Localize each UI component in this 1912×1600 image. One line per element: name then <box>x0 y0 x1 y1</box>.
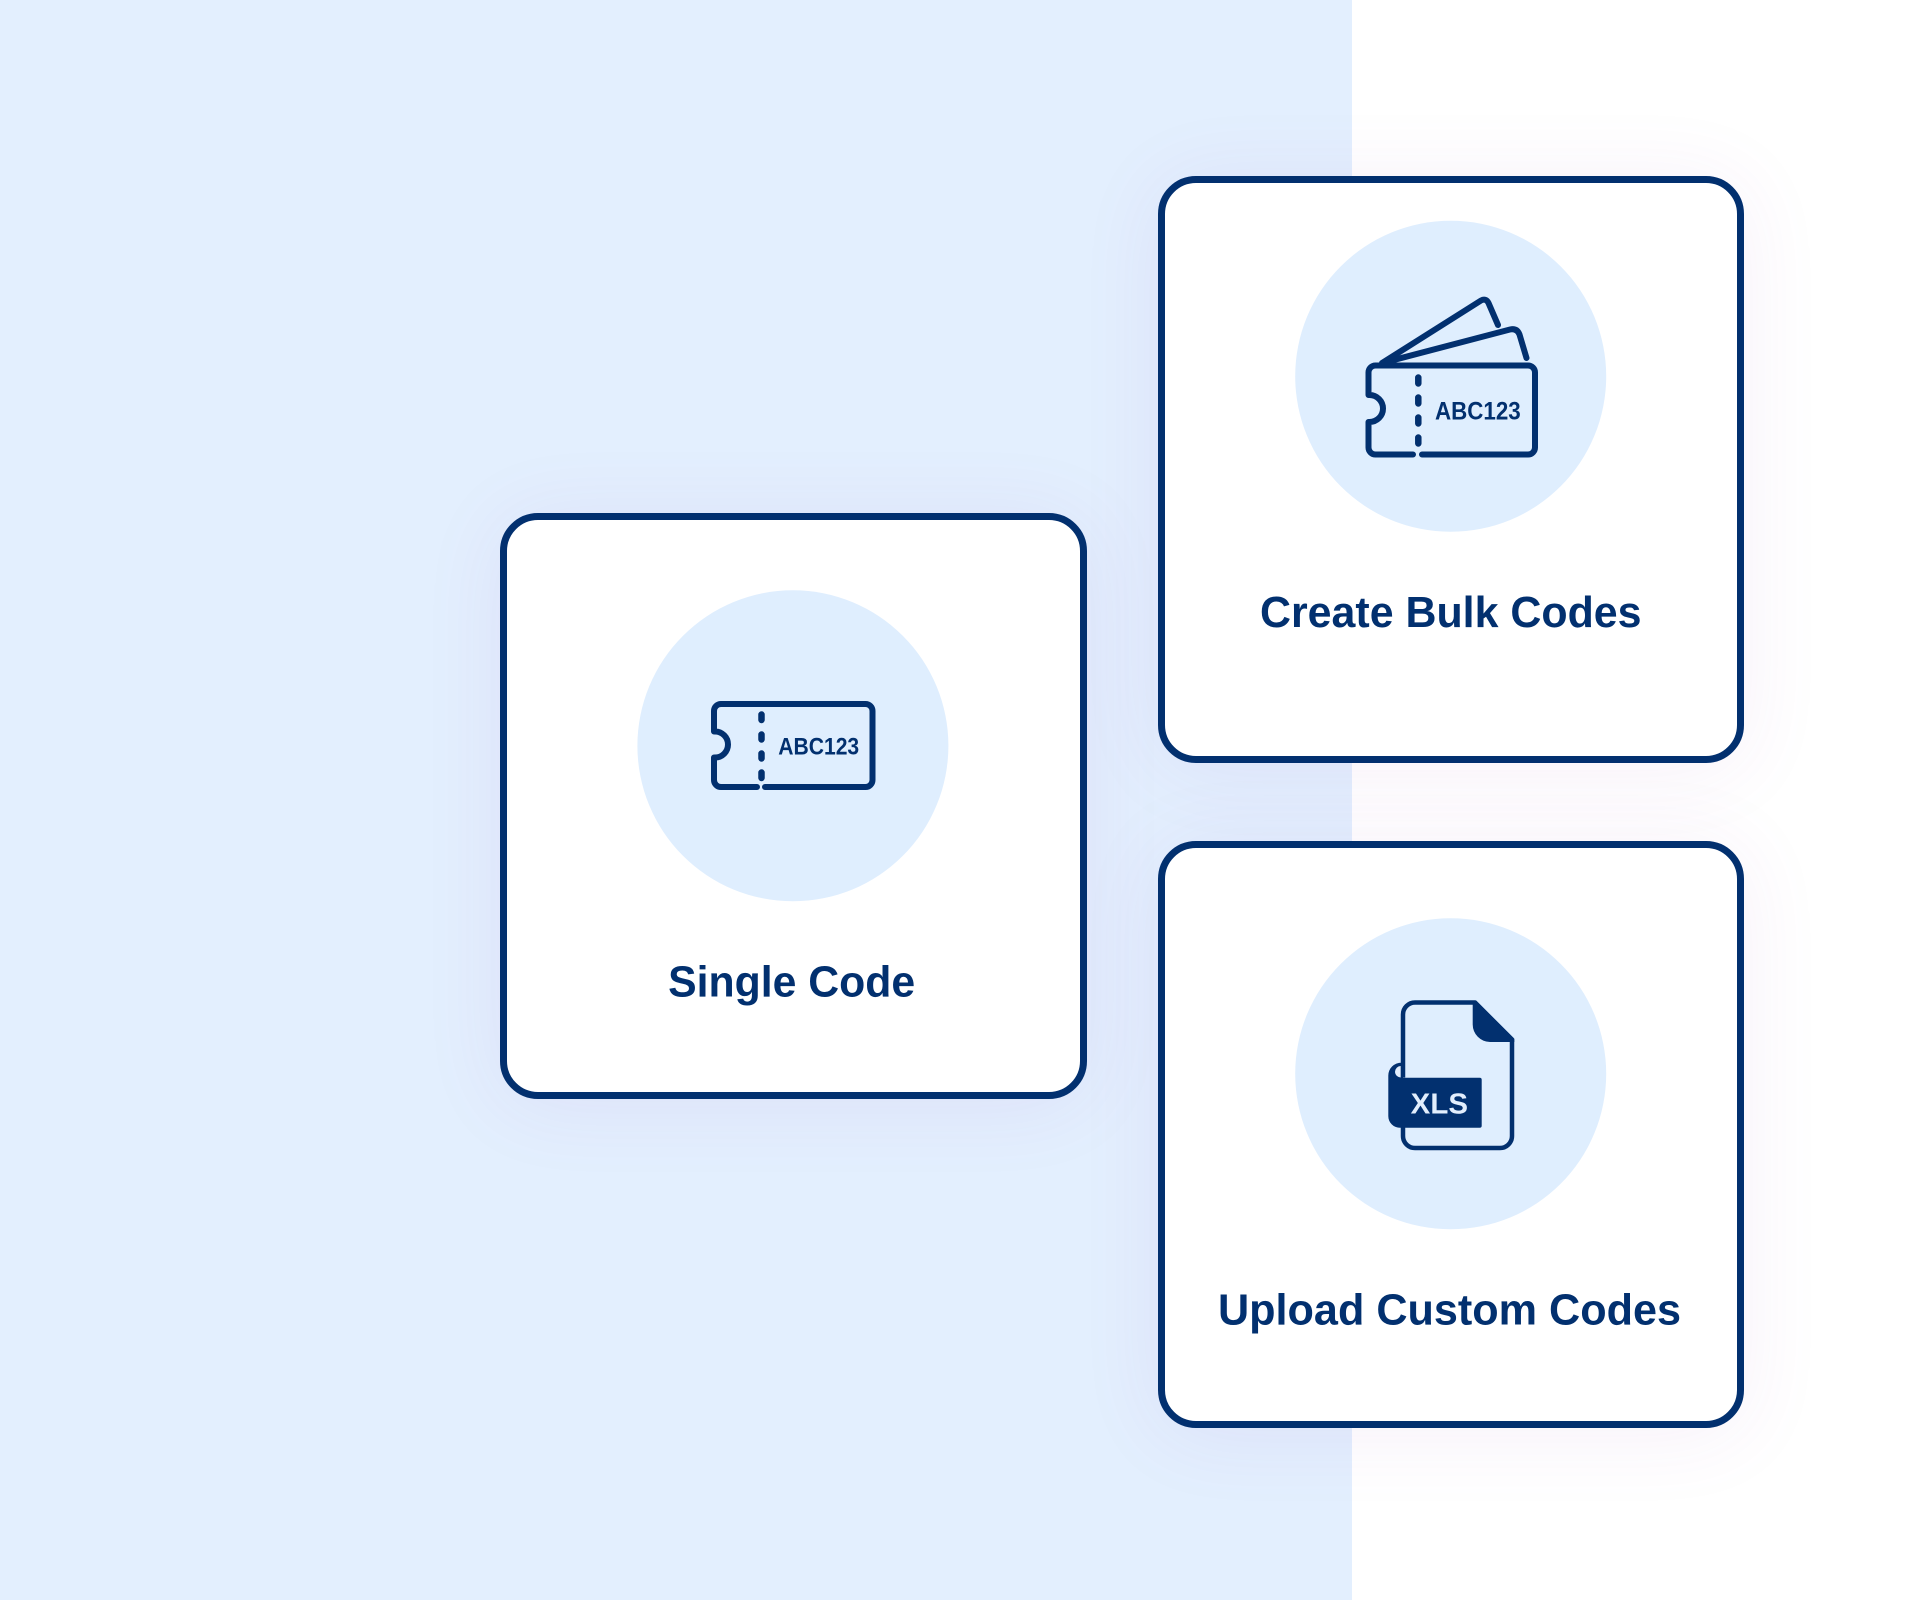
background panel: light blue <box>0 0 1352 1600</box>
panel: create bulk codes card <box>1158 176 1744 762</box>
icon background circle: bulk codes <box>1295 221 1606 532</box>
label: Single Code: Single Code <box>668 957 915 1006</box>
icon background circle: single code <box>637 590 948 901</box>
panel: upload custom codes card <box>1158 841 1744 1428</box>
label: Upload Custom Codes: Upload Custom Codes <box>1218 1286 1680 1334</box>
icon: single ticket: ABC123 <box>778 733 859 760</box>
panel: single code card <box>500 512 1086 1099</box>
icon background circle: upload codes <box>1295 918 1606 1229</box>
icon: XLS file: XLS <box>1410 1088 1468 1120</box>
icon: stacked tickets <box>1368 300 1534 454</box>
icon: XLS file <box>1388 1000 1514 1148</box>
icon: single ticket <box>714 704 872 786</box>
icon: stacked tickets: ABC123 <box>1434 398 1520 426</box>
label: Create Bulk Codes: Create Bulk Codes <box>1260 588 1641 637</box>
